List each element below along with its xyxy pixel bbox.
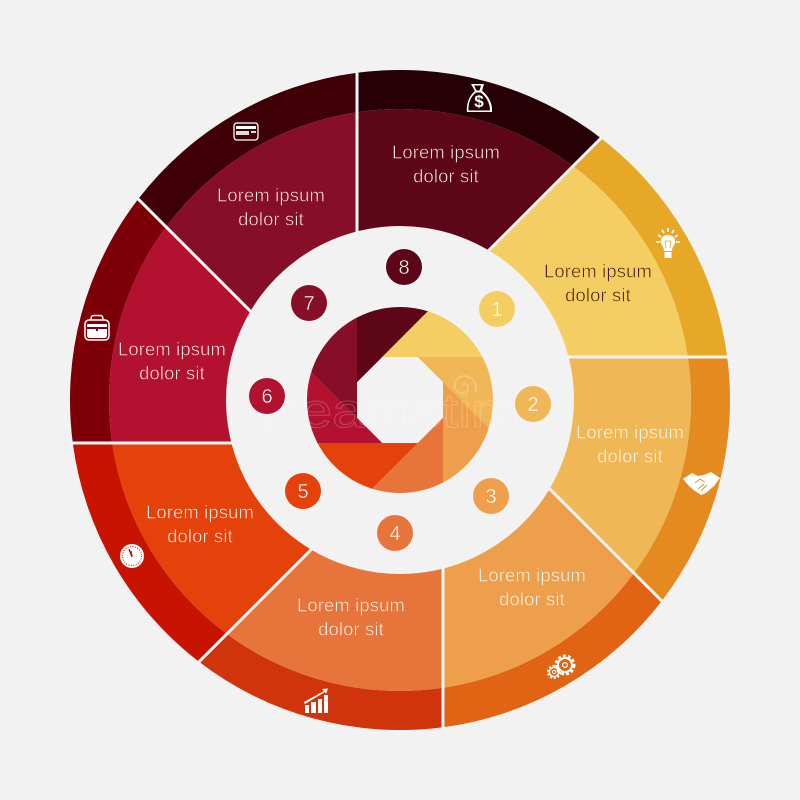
segment 2: amber — [550, 357, 730, 601]
label 6: Lorem ipsum — [118, 338, 226, 360]
icon: briefcase — [85, 316, 109, 340]
number 8: 8 — [398, 257, 410, 279]
number 5 — [285, 473, 321, 509]
number 2: 2 — [527, 394, 539, 416]
icon: credit card — [234, 123, 258, 140]
segment 5: red orange — [25, 364, 325, 664]
label 5: Lorem ipsum — [146, 502, 254, 522]
watermark: dreamstime — [248, 385, 552, 438]
number 4 — [377, 515, 413, 551]
central aperture — [304, 304, 496, 496]
number 1 — [479, 291, 515, 327]
number 3 — [473, 478, 509, 514]
number 2 — [515, 386, 551, 422]
icon: light bulb — [656, 228, 680, 258]
icon: handshake — [683, 472, 720, 495]
label 6: dolor sit — [139, 362, 205, 384]
number 7: 7 — [303, 293, 315, 315]
icon: gears — [548, 656, 574, 678]
icon: growth chart — [304, 688, 328, 713]
label 7: Lorem ipsum — [217, 184, 325, 206]
label 4: Lorem ipsum — [297, 594, 405, 616]
segment 1: yellow — [475, 136, 775, 436]
label 8: Lorem ipsum — [392, 142, 500, 162]
label 1: dolor sit — [565, 284, 631, 306]
icon: money bag — [467, 84, 492, 112]
label 5: dolor sit — [167, 526, 233, 546]
segment 7: wine — [136, 25, 436, 325]
number 7 — [291, 285, 327, 321]
label 1: Lorem ipsum — [544, 260, 652, 282]
segment 6: crimson — [70, 199, 250, 443]
number 6: 6 — [261, 386, 273, 408]
number 1: 1 — [491, 299, 503, 321]
label 2: Lorem ipsum — [576, 422, 684, 442]
number 4: 4 — [389, 523, 401, 545]
segment labels — [118, 142, 684, 640]
number 5: 5 — [297, 481, 309, 503]
number 8 — [386, 249, 422, 285]
label 3: dolor sit — [499, 588, 565, 610]
numbered circles — [249, 249, 551, 551]
segment 4: burnt orange — [199, 550, 443, 730]
segment 3: orange — [364, 475, 664, 775]
label 3: Lorem ipsum — [478, 564, 586, 586]
label 7: dolor sit — [238, 208, 304, 230]
label 8: dolor sit — [413, 166, 479, 186]
segment 8: dark maroon — [357, 70, 601, 250]
number 6 — [249, 378, 285, 414]
icon: clock — [120, 544, 144, 568]
label 4: dolor sit — [318, 618, 384, 640]
icon: money bag: $ — [474, 92, 484, 111]
number 3: 3 — [485, 486, 497, 508]
label 2: dolor sit — [597, 446, 663, 466]
